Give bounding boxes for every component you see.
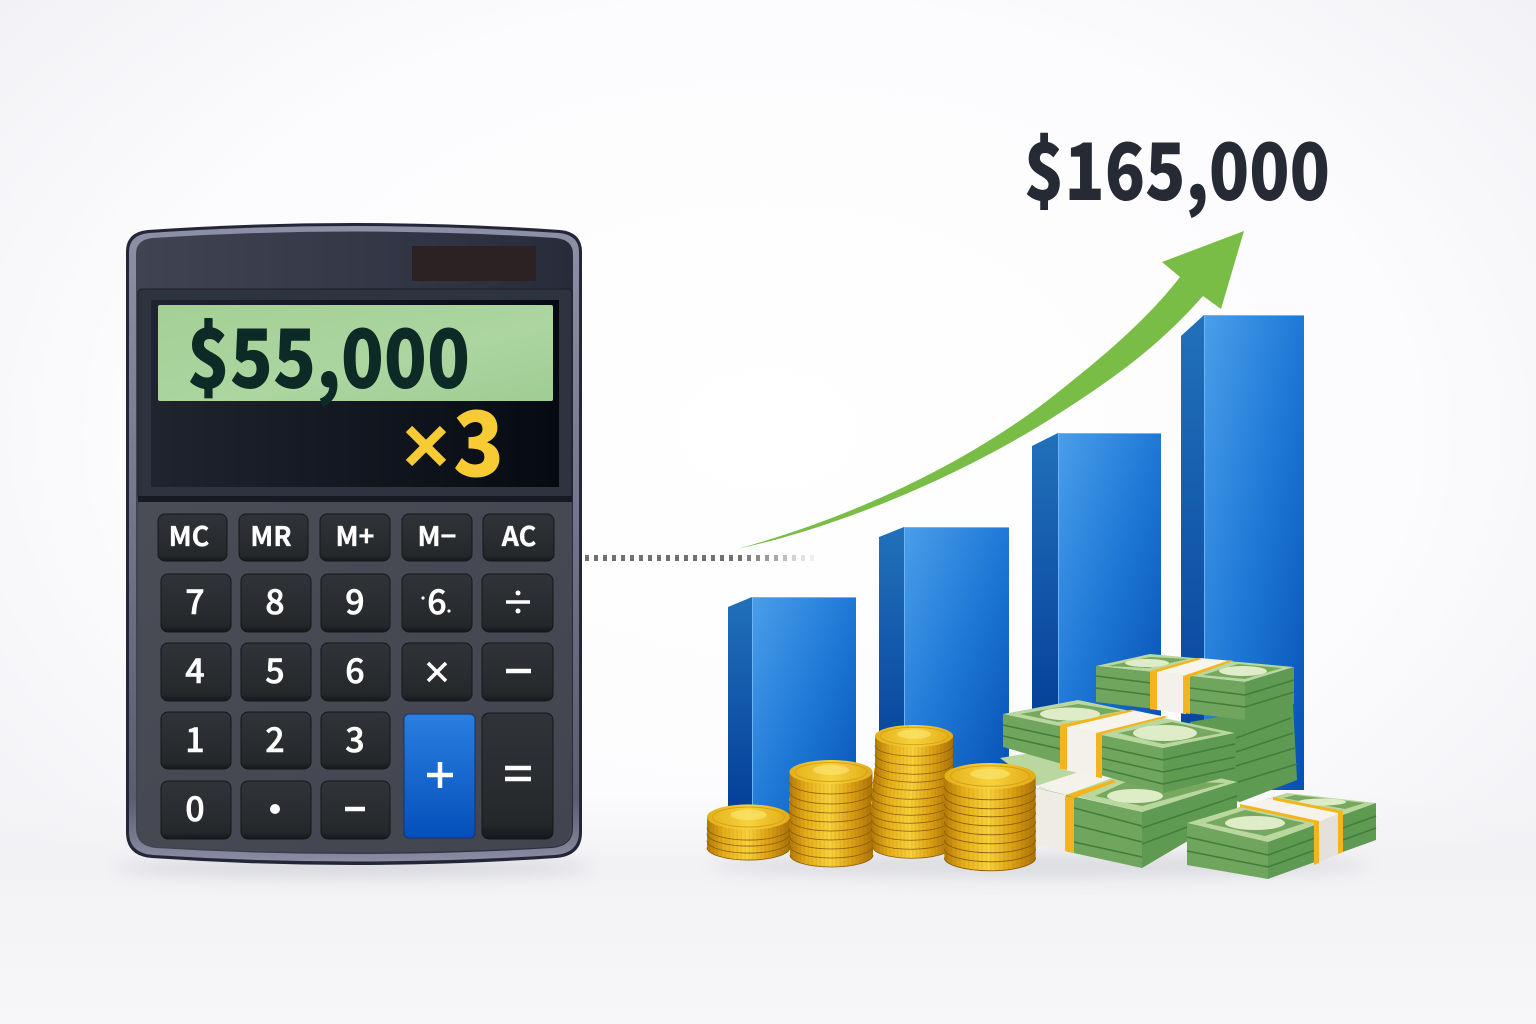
bar 1: [728, 597, 856, 837]
dotted connector: [585, 555, 814, 561]
key row 7 8 9: 8: [265, 575, 285, 624]
memory keys row: M−: [418, 515, 456, 554]
blue plus key: [404, 714, 475, 838]
coin stack 4: [944, 763, 1036, 871]
memory keys row: [158, 514, 554, 561]
result amount: $165,000: [1024, 108, 1330, 223]
key row 0 point minus: [161, 781, 390, 839]
LCD panel: [158, 305, 553, 401]
bar chart: [728, 315, 1304, 837]
key row 7 8 9: [161, 574, 553, 632]
memory keys row: MC: [169, 515, 209, 554]
calculator shadow: [114, 858, 594, 878]
key row 1 2 3: 3: [345, 713, 365, 762]
key row 7 8 9: 7: [185, 575, 205, 624]
bundle D front right: [1187, 793, 1376, 879]
memory keys row: MR: [250, 515, 292, 554]
rear stacked bundles: [1190, 704, 1297, 802]
memory keys row: M+: [336, 515, 374, 554]
bundle C lower: [1000, 745, 1237, 868]
coin stack 1: [707, 804, 790, 860]
calculator body: [126, 223, 582, 865]
key row 1 2 3: 2: [265, 713, 285, 762]
display: [138, 289, 572, 502]
amount on LCD: $55,000: [187, 293, 470, 412]
bundle B middle: [1003, 700, 1235, 793]
key row 7 8 9: 9: [345, 575, 365, 624]
bundle A top: [1096, 654, 1294, 720]
calculator: [126, 223, 582, 865]
growth arrow: [737, 231, 1244, 549]
key row 7 8 9: 6: [427, 575, 447, 624]
key row 4 5 6: [161, 643, 553, 701]
keypad: [158, 514, 554, 839]
memory keys row: AC: [501, 515, 536, 554]
coin stack 2: [789, 760, 873, 867]
key row 0 point minus: 0: [185, 782, 205, 831]
multiplier: [409, 372, 504, 502]
bar 4: [1181, 315, 1304, 790]
bar 2: [879, 527, 1009, 787]
key row 4 5 6: 5: [265, 644, 285, 693]
key row 4 5 6: 6: [345, 644, 365, 693]
coin stack 3: [871, 725, 953, 858]
key row 1 2 3: 1: [185, 713, 205, 762]
key row 1 2 3: [161, 712, 390, 769]
key row 4 5 6: 4: [185, 644, 205, 693]
floor shadow under money: [710, 854, 1370, 878]
equals key: [482, 713, 553, 839]
money stacks: [1000, 654, 1376, 879]
bar 3: [1032, 433, 1161, 733]
multiplier: 3: [453, 372, 504, 502]
solar panel: [412, 246, 536, 281]
coin stacks: [707, 725, 1036, 871]
